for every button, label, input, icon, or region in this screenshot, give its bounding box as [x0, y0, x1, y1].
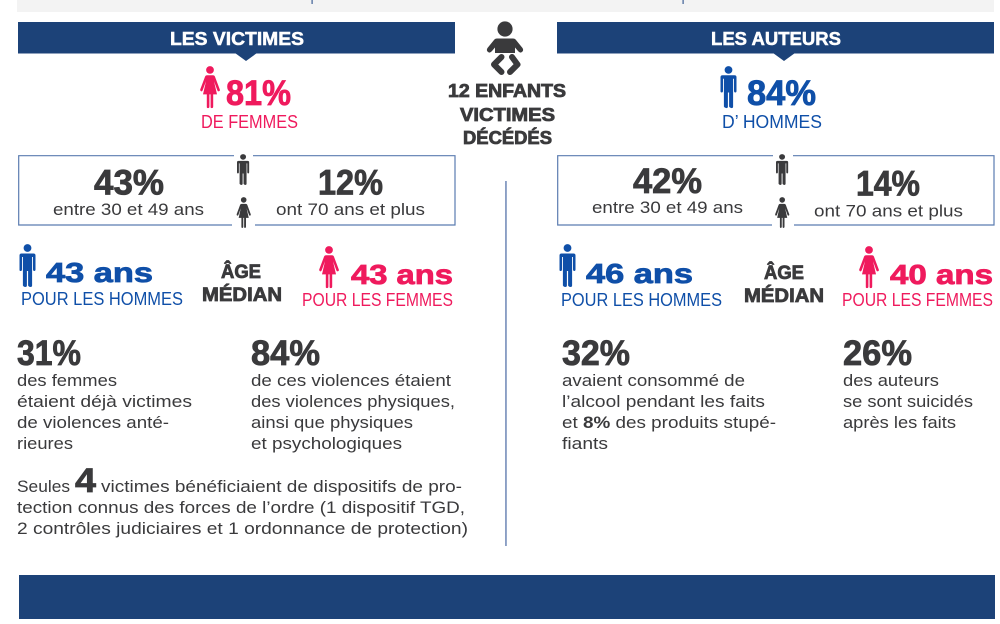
text: 12 enfants victimes décédés	[448, 81, 566, 148]
text block: 84%: ainsi que physiques	[251, 413, 413, 432]
text block: 32%: et 8% des produits stupé-	[562, 413, 776, 432]
stat: 14%: 14%	[856, 164, 920, 204]
center divider	[505, 181, 507, 546]
stat: 81% de femmes	[200, 66, 298, 132]
stat: 12%: ont 70 ans et plus	[276, 200, 425, 219]
panel: les victimes	[17, 22, 468, 538]
stat: 81% de femmes: 81%	[226, 74, 291, 113]
median age: women: POUR LES FEMMES	[302, 290, 453, 310]
stat: 42%: entre 30 et 49 ans	[592, 198, 743, 217]
age distribution box	[558, 154, 994, 228]
stat: 84% d'hommes: D’ HOMMES	[722, 112, 822, 132]
median age: men	[19, 244, 183, 309]
text block: 32%	[562, 334, 776, 453]
text block: 26%	[843, 334, 973, 432]
median age label: MÉDIAN	[202, 284, 282, 306]
median age label: MÉDIAN	[744, 285, 824, 307]
text block: protection: Seules	[17, 477, 70, 496]
heading: les victimes	[18, 22, 455, 61]
text: 12 enfants victimes décédés: DÉCÉDÉS	[463, 127, 552, 148]
stat: 43%: entre 30 et 49 ans	[53, 200, 204, 219]
text block: 32%: fiants	[562, 434, 608, 453]
icon: man	[237, 154, 249, 185]
age distribution box	[19, 154, 455, 228]
heading: les auteurs	[557, 22, 994, 61]
text: 12 enfants victimes décédés: 12 ENFANTS	[448, 81, 566, 101]
median age: men: 46 ans	[586, 258, 693, 289]
stat: 14%	[814, 164, 963, 220]
text block: 31%	[17, 334, 192, 453]
median age: women: 43 ans	[351, 259, 453, 290]
median age: men	[559, 244, 722, 310]
text block: 84%	[251, 334, 455, 453]
text block: protection: 2 contrôles judiciaires et 1 ordonnance de protection)	[17, 519, 468, 538]
text block: 31%: rieures	[17, 434, 73, 453]
text block: 32%: l’alcool pendant les faits	[562, 392, 765, 411]
median age: men: 43 ans	[46, 257, 153, 288]
median age label: ÂGE	[764, 262, 804, 284]
text block: 26%: 26%	[843, 334, 912, 373]
text block: 26%: après les faits	[843, 413, 956, 432]
text block: 32%: 32%	[562, 334, 630, 373]
text block: 32%: avaient consommé de	[562, 371, 745, 390]
text block: 31%: de violences anté-	[17, 413, 169, 432]
text block: 26%: des auteurs	[843, 371, 939, 390]
heading: les auteurs: LES AUTEURS	[711, 28, 841, 49]
text block: 84%: de ces violences étaient	[251, 371, 451, 390]
stat: 12%: 12%	[318, 164, 383, 202]
text block: 26%: se sont suicidés	[843, 392, 973, 411]
text block: 84%: des violences physiques,	[251, 392, 455, 411]
median age: women	[842, 246, 993, 310]
text block: 31%: étaient déjà victimes	[17, 392, 192, 411]
text block: 31%: 31%	[17, 334, 81, 373]
median age label	[744, 262, 824, 307]
text block: 31%: des femmes	[17, 371, 117, 390]
text: 12 enfants victimes décédés: VICTIMES	[460, 105, 555, 125]
median age: women	[302, 246, 453, 310]
median age label: ÂGE	[221, 261, 261, 283]
text block: 84%: 84%	[251, 334, 320, 373]
text block: 84%: et psychologiques	[251, 434, 402, 453]
stat: 42%: 42%	[633, 162, 702, 201]
stat: 81% de femmes: DE FEMMES	[201, 112, 298, 132]
median age: men: POUR LES HOMMES	[21, 289, 183, 309]
stat: 84% d'hommes	[720, 66, 822, 132]
icon: woman	[237, 197, 251, 228]
icon: woman	[775, 197, 789, 228]
text block: protection: victimes bénéficiaient de dispositifs de pro-	[101, 477, 462, 496]
text block: protection	[17, 462, 468, 538]
top strip	[17, 0, 994, 12]
median age: women: 40 ans	[890, 259, 993, 290]
heading: les victimes: LES VICTIMES	[170, 28, 304, 49]
panel: les auteurs	[557, 22, 994, 453]
stat: 14%: ont 70 ans et plus	[814, 202, 963, 220]
median age: men: POUR LES HOMMES	[561, 290, 722, 310]
median age label	[202, 261, 282, 306]
bottom bar	[19, 575, 995, 619]
stat: 43%: 43%	[94, 164, 164, 202]
icon: man	[776, 154, 788, 185]
panel: enfants décédés	[448, 21, 566, 148]
stat: 84% d'hommes: 84%	[747, 74, 816, 113]
stat: 12%	[276, 164, 425, 219]
icon: baby	[487, 21, 523, 72]
text block: protection: 4	[75, 462, 96, 500]
stat: 43%	[53, 164, 204, 219]
text block: protection: tection connus des forces de l’ordre (1 dispositif TGD,	[17, 498, 465, 517]
stat: 42%	[592, 162, 743, 217]
